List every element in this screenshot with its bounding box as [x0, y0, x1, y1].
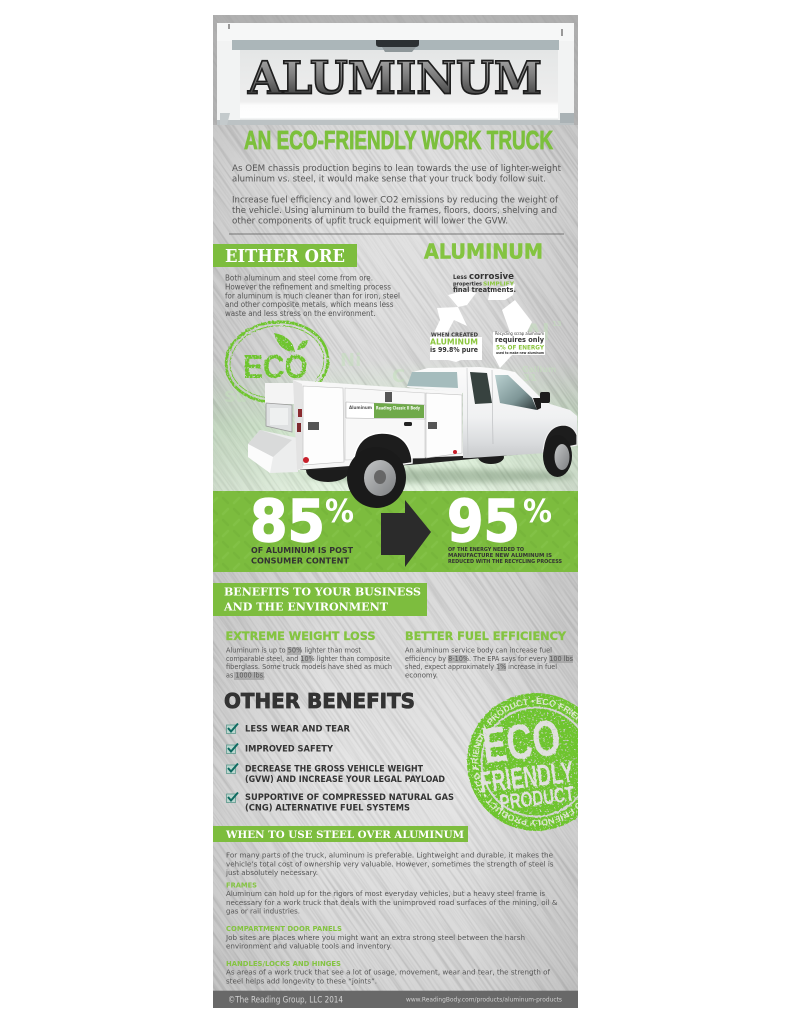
icon: recycling arrows [430, 284, 545, 368]
stat: 95 percent: % [523, 492, 552, 530]
text: when to use steel intro: vehicle’s total cost of ownership very valuable. However, sometimes the strength of steel is [226, 859, 554, 868]
text: handles, locks and hinges: HANDLES/LOCKS AND HINGES [226, 960, 341, 968]
stat: 95 percent: OF THE ENERGY NEEDED TO [448, 547, 525, 553]
check item: vehicle weight [226, 764, 445, 785]
stamp: eco friendly product: FRIENDLY [478, 756, 576, 800]
text: handles, locks and hinges: steel helps add longevity to these “joints”. [226, 976, 377, 985]
text: compartment door panels: Job sites are places where you might want an extra strong steel between the harsh [225, 933, 525, 942]
text: frames: Aluminum can hold up for the rigors of most everyday vehicles, but a heavy steel frame is [226, 889, 545, 898]
column: extreme weight loss: EXTREME WEIGHT LOSS [226, 629, 376, 643]
column: extreme weight loss: comparable steel, and 10% lighter than composite [226, 654, 390, 663]
heading: aluminum: ALUMINUM [424, 239, 543, 263]
background: faint periodic table symbols [224, 320, 562, 406]
check item: natural gas [226, 792, 454, 814]
heading: benefits: AND THE ENVIRONMENT [223, 600, 388, 614]
footer: ©The Reading Group, LLC 2014 [228, 994, 343, 1004]
column: better fuel efficiency: BETTER FUEL EFFICIENCY [405, 629, 567, 643]
background: faint periodic table symbols: Su [224, 387, 247, 406]
stat: 95 percent: 95 [447, 487, 520, 555]
stamp: eco: ECO [243, 348, 308, 385]
header: white tailgate [213, 15, 578, 125]
background: faint periodic table symbols: 13 [552, 320, 562, 328]
stat: 85 percent: % [325, 492, 354, 530]
text: frames: necessary for a work truck that deals with the unimproved road surfaces of the mining, oil & [226, 898, 558, 907]
heading: when to use steel: WHEN TO USE STEEL OVER ALUMINUM [225, 829, 464, 841]
background: faint periodic table symbols: Gallium [522, 365, 556, 374]
check item: less wear: LESS WEAR AND TEAR [245, 725, 350, 735]
recycling text: purity: ALUMINUM [430, 338, 478, 346]
recycling text: energy: Recycling scrap aluminum [495, 331, 544, 336]
text: either ore: and other composite metals, which means less [225, 300, 394, 309]
front wheel arch [543, 425, 577, 452]
background: faint periodic table symbols: 31 [523, 373, 537, 384]
column: better fuel efficiency: efficiency by 8-10%. The EPA says for every 100 lbs [405, 654, 573, 663]
column: extreme weight loss: fiberglass. Some truck models have shed as much [226, 662, 392, 671]
service body [293, 380, 463, 470]
recycling text: energy [495, 331, 545, 355]
recycling text: corrosive: properties [453, 282, 482, 288]
stat: 85 percent [251, 497, 354, 564]
text: handles, locks and hinges: As areas of a work truck that see a lot of usage, movement, wear and tear, the strength of [226, 968, 550, 977]
intro text: other components of upfit truck equipment will lower the GVW. [232, 216, 508, 226]
recycling text: corrosive [453, 272, 516, 294]
cab [407, 367, 578, 458]
heading: other benefits: OTHER BENEFITS [224, 689, 415, 713]
heading: benefits: BENEFITS TO YOUR BUSINESS [224, 585, 421, 599]
text: either ore: for aluminum is much cleaner than for iron, steel [225, 291, 400, 300]
far wheels [306, 456, 504, 482]
panel: green statistics band [213, 487, 578, 572]
stat: 95 percent: MANUFACTURE NEW ALUMINUM IS [448, 553, 552, 559]
recycling text: purity [430, 332, 478, 354]
rear wheel arch [355, 434, 413, 465]
recycling text: purity: WHEN CREATED [431, 332, 478, 338]
recycling text: corrosive: corrosive [469, 272, 514, 282]
column: better fuel efficiency: economy. [405, 670, 438, 680]
truck decal [346, 402, 425, 419]
text: compartment door panels: COMPARTMENT DOOR PANELS [226, 925, 342, 933]
footer [213, 991, 578, 1008]
column: extreme weight loss [226, 629, 392, 680]
recycling text: energy: 5% OF ENERGY [496, 346, 545, 352]
column: extreme weight loss: as 1000 lbs. [226, 670, 265, 680]
column: better fuel efficiency: An aluminum service body can increase fuel [405, 646, 552, 654]
recycling text: energy: requires only [495, 336, 545, 344]
rear wheel [347, 456, 406, 508]
text: either ore [225, 274, 400, 318]
stat: 85 percent: OF ALUMINUM IS POST [251, 545, 353, 555]
text: frames: gas or rail industries. [226, 906, 300, 916]
title: ALUMINUM [247, 52, 542, 104]
stamp: eco [224, 320, 330, 402]
recycling text: energy: used to make new aluminum [496, 351, 544, 355]
check item: safety: IMPROVED SAFETY [245, 745, 334, 755]
background: faint periodic table symbols: Al [525, 321, 550, 346]
recycling text: corrosive: SIMPLIFY [483, 282, 515, 288]
icon: tailgate handle [376, 40, 419, 52]
intro text [232, 163, 562, 226]
check item: natural gas: SUPPORTIVE OF COMPRESSED NATURAL GAS [245, 793, 454, 803]
check item: natural gas: (CNG) ALTERNATIVE FUEL SYSTEMS [245, 804, 410, 814]
recycling text: corrosive: final treatments. [453, 286, 516, 294]
stat: 95 percent: REDUCED WITH THE RECYCLING PROCESS [448, 559, 562, 565]
arrow [381, 500, 431, 567]
stamp: eco friendly product: ECO [479, 709, 564, 774]
background: faint periodic table symbols: C [392, 366, 405, 387]
column: better fuel efficiency: shed, expect approximately 1% increase in fuel [405, 662, 557, 671]
recycling text: purity: is 99.8% pure [430, 346, 478, 354]
text: frames: FRAMES [226, 881, 257, 889]
stamp: eco friendly product: PRODUCT [498, 783, 576, 815]
check item: vehicle weight: (GVW) AND INCREASE YOUR LEGAL PAYLOAD [245, 775, 445, 785]
stamp: eco friendly product: ECO FRIENDLY PRODUCT • ECO FRIENDLY PRODUCT • ECO FRIENDLY PRODUCT • [472, 698, 578, 826]
background: faint periodic table symbols: Ni [340, 350, 361, 371]
intro text: As OEM chassis production begins to lean towards the use of lighter-weight [232, 163, 562, 173]
text: when to use steel intro [225, 851, 554, 877]
recycling text: corrosive: Less [453, 274, 467, 281]
truck decal: Aluminum [349, 405, 372, 411]
stat: 85 percent: CONSUMER CONTENT [251, 556, 349, 566]
footer: www.ReadingBody.com/products/aluminum-products [406, 996, 562, 1004]
text: when to use steel intro: For many parts of the truck, aluminum is preferable. Lightweight and durable, it makes the [226, 851, 553, 860]
text: compartment door panels [225, 925, 525, 951]
text: either ore: waste and less stress on the environment. [225, 309, 376, 318]
heading: either ore: EITHER ORE [225, 246, 345, 267]
truck photo [248, 367, 578, 508]
text: either ore: Both aluminum and steel come from ore. [225, 274, 373, 283]
text: handles, locks and hinges [226, 960, 550, 985]
column: better fuel efficiency [405, 629, 573, 680]
column: extreme weight loss: Aluminum is up to 50% lighter than most [226, 646, 361, 654]
ground shadow [305, 469, 575, 483]
check item: vehicle weight: DECREASE THE GROSS VEHICLE WEIGHT [245, 765, 423, 775]
stat: 95 percent [448, 497, 562, 563]
checklist [226, 724, 454, 814]
text: when to use steel intro: just absolutely necessary. [225, 868, 318, 877]
truck decal: Reading Classic II Body [376, 406, 420, 412]
rear door box and tailgate [248, 383, 298, 473]
intro text: the vehicle. Using aluminum to build the frames, floors, doors, shelving and [232, 205, 557, 215]
text: either ore: However the refinement and smelting process [225, 283, 391, 292]
front wheel [543, 444, 572, 477]
intro text: aluminum vs. steel, it would make sense that your truck body follow suit. [232, 173, 546, 183]
text: compartment door panels: environment and valuable tools and inventory. [226, 942, 392, 951]
heading: benefits [213, 583, 427, 616]
intro text: Increase fuel efficiency and lower CO2 emissions by reducing the weight of [232, 195, 559, 205]
text: frames [226, 881, 558, 916]
subtitle: AN ECO-FRIENDLY WORK TRUCK [244, 127, 553, 155]
stat: 85 percent: 85 [250, 487, 325, 555]
background: brushed metal [213, 15, 578, 1008]
